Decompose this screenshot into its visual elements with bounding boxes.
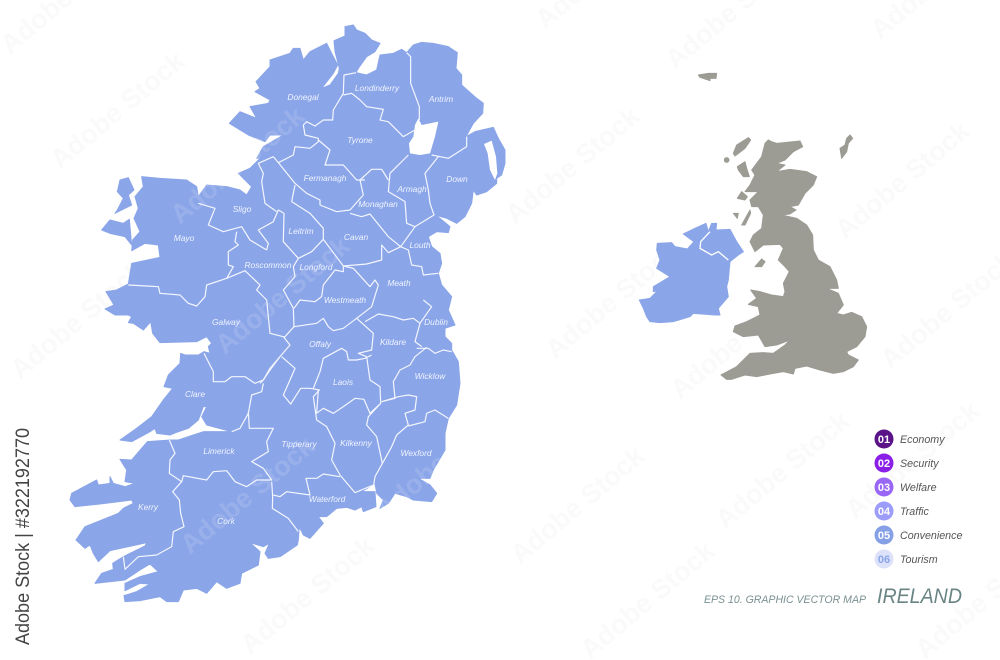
county labels: Kerry	[138, 502, 159, 512]
island outline	[70, 25, 505, 602]
county labels: Donegal	[287, 92, 320, 102]
legend item 01	[874, 430, 945, 448]
map: Ireland counties: Adobe Stock	[370, 395, 516, 525]
county labels: Down	[446, 174, 468, 184]
Northern Ireland border	[700, 232, 728, 260]
legend item 04: 04	[878, 506, 891, 518]
county labels: Sligo	[233, 204, 252, 214]
map: Ireland counties: Adobe Stock	[165, 100, 311, 230]
legend item 03: 03	[878, 482, 890, 494]
county labels: Leitrim	[288, 226, 314, 236]
county labels: Wicklow	[415, 371, 446, 381]
Great Britain	[698, 73, 867, 379]
county labels: Laois	[333, 377, 354, 387]
county labels: Roscommon	[244, 260, 292, 270]
text: Adobe Stock	[710, 405, 856, 535]
county labels: Meath	[387, 278, 411, 288]
county labels: Clare	[185, 389, 205, 399]
legend	[874, 430, 962, 568]
legend item 06	[874, 550, 938, 568]
legend item 03: Welfare	[900, 482, 937, 494]
county labels: Mayo	[174, 233, 195, 243]
legend item 04: Traffic	[900, 506, 930, 518]
legend item 01: 01	[878, 434, 890, 446]
county labels: Limerick	[203, 446, 235, 456]
county labels: Kildare	[380, 337, 406, 347]
text: Adobe Stock	[830, 115, 976, 245]
county labels: Wexford	[400, 448, 432, 458]
map: Ireland counties: Adobe Stock	[210, 230, 356, 360]
legend item 02: Security	[900, 458, 939, 470]
legend item 01: Economy	[900, 434, 945, 446]
caption: EPS note: EPS 10. GRAPHIC VECTOR MAP	[704, 594, 867, 606]
legend item 04	[874, 502, 930, 520]
county labels: Cork	[217, 516, 236, 526]
legend item 06: 06	[878, 554, 890, 566]
county labels: Monaghan	[358, 199, 398, 209]
text: Adobe Stock	[840, 395, 986, 525]
title: IRELAND: IRELAND	[877, 585, 962, 608]
map: Ireland counties: Adobe Stock	[175, 430, 321, 560]
county labels: Westmeath	[324, 295, 366, 305]
county labels: Fermanagh	[304, 173, 347, 183]
text: Adobe Stock	[540, 235, 686, 365]
county labels: Waterford	[309, 494, 346, 504]
text: Adobe Stock	[235, 530, 381, 660]
county labels: Kilkenny	[340, 438, 373, 448]
map: Ireland counties	[70, 25, 516, 602]
county labels: Offaly	[309, 339, 332, 349]
legend item 05	[874, 526, 962, 544]
text: Adobe Stock	[45, 45, 191, 175]
text: Adobe Stock	[505, 440, 651, 570]
county labels: Galway	[212, 317, 241, 327]
county labels: Tyrone	[347, 135, 373, 145]
text: Adobe Stock	[665, 275, 811, 405]
side credit: Adobe Stock | #322192770	[13, 428, 34, 645]
legend item 02	[874, 454, 939, 472]
county labels: Londinderry	[355, 83, 400, 93]
text: Adobe Stock	[5, 255, 151, 385]
county labels: Antrim	[428, 94, 453, 104]
legend item 03	[874, 478, 937, 496]
legend item 05: Convenience	[900, 530, 962, 542]
county labels: Armagh	[396, 184, 427, 194]
legend item 02: 02	[878, 458, 890, 470]
county labels: Longford	[299, 262, 333, 272]
county labels	[138, 83, 468, 526]
text: Adobe Stock	[500, 100, 646, 230]
map: British Isles overview	[639, 73, 867, 379]
legend item 05: 05	[878, 530, 890, 542]
county labels: Cavan	[344, 232, 368, 242]
county labels: Dublin	[424, 317, 448, 327]
county labels: Louth	[410, 240, 431, 250]
county labels: Tipperary	[281, 439, 317, 449]
legend item 06: Tourism	[900, 554, 938, 566]
Ireland mini map	[639, 223, 743, 323]
county borders	[123, 53, 467, 569]
